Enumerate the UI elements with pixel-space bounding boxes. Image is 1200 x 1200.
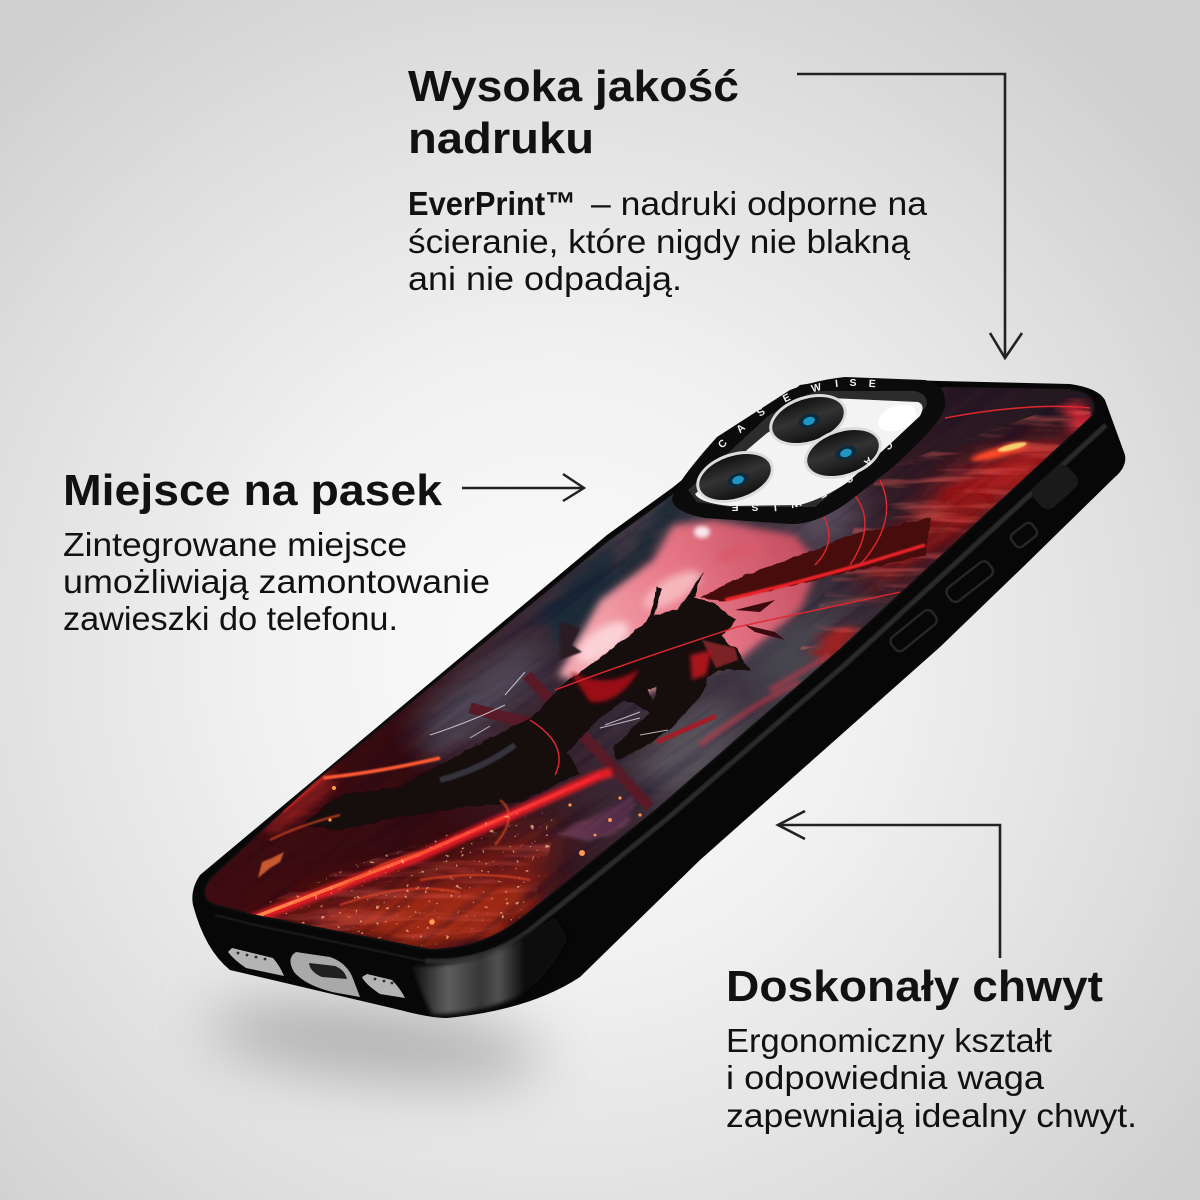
artwork: red threads xyxy=(530,406,1090,775)
heading: print quality xyxy=(408,62,739,163)
description: print quality: ani nie odpadają. xyxy=(408,260,682,297)
artwork: ember flares xyxy=(270,800,530,905)
logo ring: top: S xyxy=(849,377,857,389)
logo ring: top: S xyxy=(755,406,768,419)
logo ring: top: W xyxy=(810,381,823,395)
logo ring: bottom: E xyxy=(816,487,829,501)
arrow: strap place xyxy=(462,474,584,501)
artwork: orange streaks xyxy=(323,758,440,778)
phone shadow xyxy=(202,988,548,1096)
artwork: moon highlight xyxy=(694,526,710,538)
artwork: lightning xyxy=(430,672,668,738)
artwork: red beam xyxy=(250,772,612,920)
artwork: samurai wing xyxy=(700,518,930,602)
artwork: lilac clouds xyxy=(406,640,548,764)
logo ring: top: E xyxy=(868,378,876,390)
artwork: red streak lower zone xyxy=(270,822,554,942)
description: strap place: zawieszki do telefonu. xyxy=(63,600,398,637)
artwork: navy sky xyxy=(610,494,694,586)
heading: grip: Doskonały chwyt xyxy=(726,962,1103,1011)
feature text: grip xyxy=(726,962,1137,1134)
logo ring: bottom: C xyxy=(881,438,895,452)
description: grip: zapewniają idealny chwyt. xyxy=(726,1097,1137,1134)
logo ring: bottom: A xyxy=(861,454,875,469)
artwork: small dark cloud xyxy=(560,622,582,660)
camera window xyxy=(695,398,923,506)
glossy corner xyxy=(412,916,568,1014)
printed artwork xyxy=(205,387,1094,949)
feature text: strap place xyxy=(63,466,490,637)
artwork: dark brush streaks xyxy=(252,388,1054,947)
camera bump xyxy=(672,377,945,524)
artwork: samurai figure xyxy=(600,573,750,760)
description: strap place: Zintegrowane miejsce xyxy=(63,526,407,563)
description: grip xyxy=(726,1022,1137,1134)
description: print quality: EverPrint™ xyxy=(408,185,576,222)
description: print quality xyxy=(408,185,928,297)
logo ring: bottom: I xyxy=(773,501,777,513)
heading: print quality: nadruku xyxy=(408,114,594,163)
description: print quality: ścieranie, które nigdy nie blakną xyxy=(408,223,911,260)
feature text: print quality xyxy=(408,62,928,297)
artwork: wing shards xyxy=(735,600,785,640)
logo ring: bottom: W xyxy=(789,496,802,510)
artwork: red swirl top right xyxy=(918,425,1082,531)
artwork: sun flare xyxy=(970,439,1030,465)
lens: right xyxy=(798,418,888,488)
logo ring: top xyxy=(716,377,876,451)
arrow: print quality xyxy=(797,74,1022,358)
description: print quality: – nadruki odporne na xyxy=(591,185,928,222)
port: right speaker xyxy=(362,974,405,998)
port: charging xyxy=(290,952,360,997)
logo ring: top: I xyxy=(835,378,839,390)
artwork: moon bright clouds xyxy=(574,550,738,665)
logo ring: top: A xyxy=(734,421,748,436)
camera lip xyxy=(688,391,927,507)
case bezel highlight xyxy=(425,425,1106,961)
artwork: cross xyxy=(470,675,650,807)
lens: top xyxy=(763,385,853,455)
arrow: grip xyxy=(778,811,1000,958)
flash xyxy=(874,399,920,437)
logo ring: bottom: S xyxy=(751,501,759,513)
logo ring: bottom: E xyxy=(731,501,739,513)
artwork: blood moon xyxy=(558,520,820,695)
artwork: lit armour xyxy=(702,640,738,668)
description: grip: i odpowiednia waga xyxy=(726,1059,1045,1096)
description: strap place: umożliwiają zamontowanie xyxy=(63,563,490,600)
artwork: sparks xyxy=(258,786,642,925)
bottom edge highlight xyxy=(215,915,425,961)
phone case xyxy=(192,377,1126,1018)
logo ring: bottom: S xyxy=(842,471,855,485)
artwork: sword xyxy=(657,716,716,742)
heading: strap place: Miejsce na pasek xyxy=(63,466,443,515)
description: strap place xyxy=(63,526,490,637)
artwork: painted background xyxy=(240,398,1092,950)
lens: left xyxy=(690,442,780,512)
logo ring: top: C xyxy=(716,437,730,451)
description: grip: Ergonomiczny kształt xyxy=(726,1022,1052,1059)
logo ring: bottom xyxy=(731,438,895,513)
logo ring: top: E xyxy=(781,391,792,405)
screen edge xyxy=(204,389,1095,950)
artwork: speckle xyxy=(240,810,560,950)
case body xyxy=(192,378,1125,1018)
heading: print quality: Wysoka jakość xyxy=(408,62,739,111)
port: left speaker xyxy=(228,948,284,976)
artwork: lower maroon xyxy=(240,825,560,950)
side buttons xyxy=(888,463,1080,654)
artwork: red streak upper zone xyxy=(800,395,1090,650)
artwork: cloak xyxy=(303,650,653,830)
